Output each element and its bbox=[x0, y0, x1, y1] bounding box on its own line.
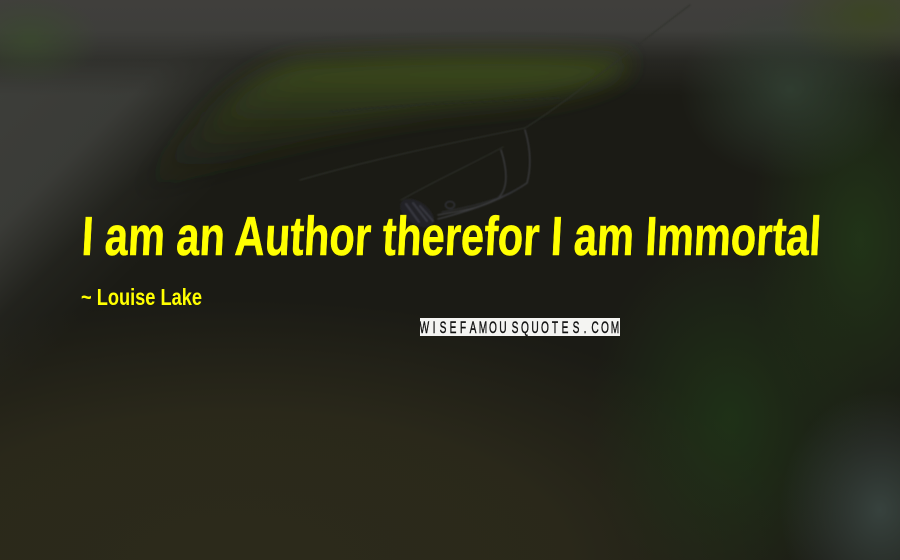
author attribution: ~ Louise Lake bbox=[81, 284, 202, 310]
